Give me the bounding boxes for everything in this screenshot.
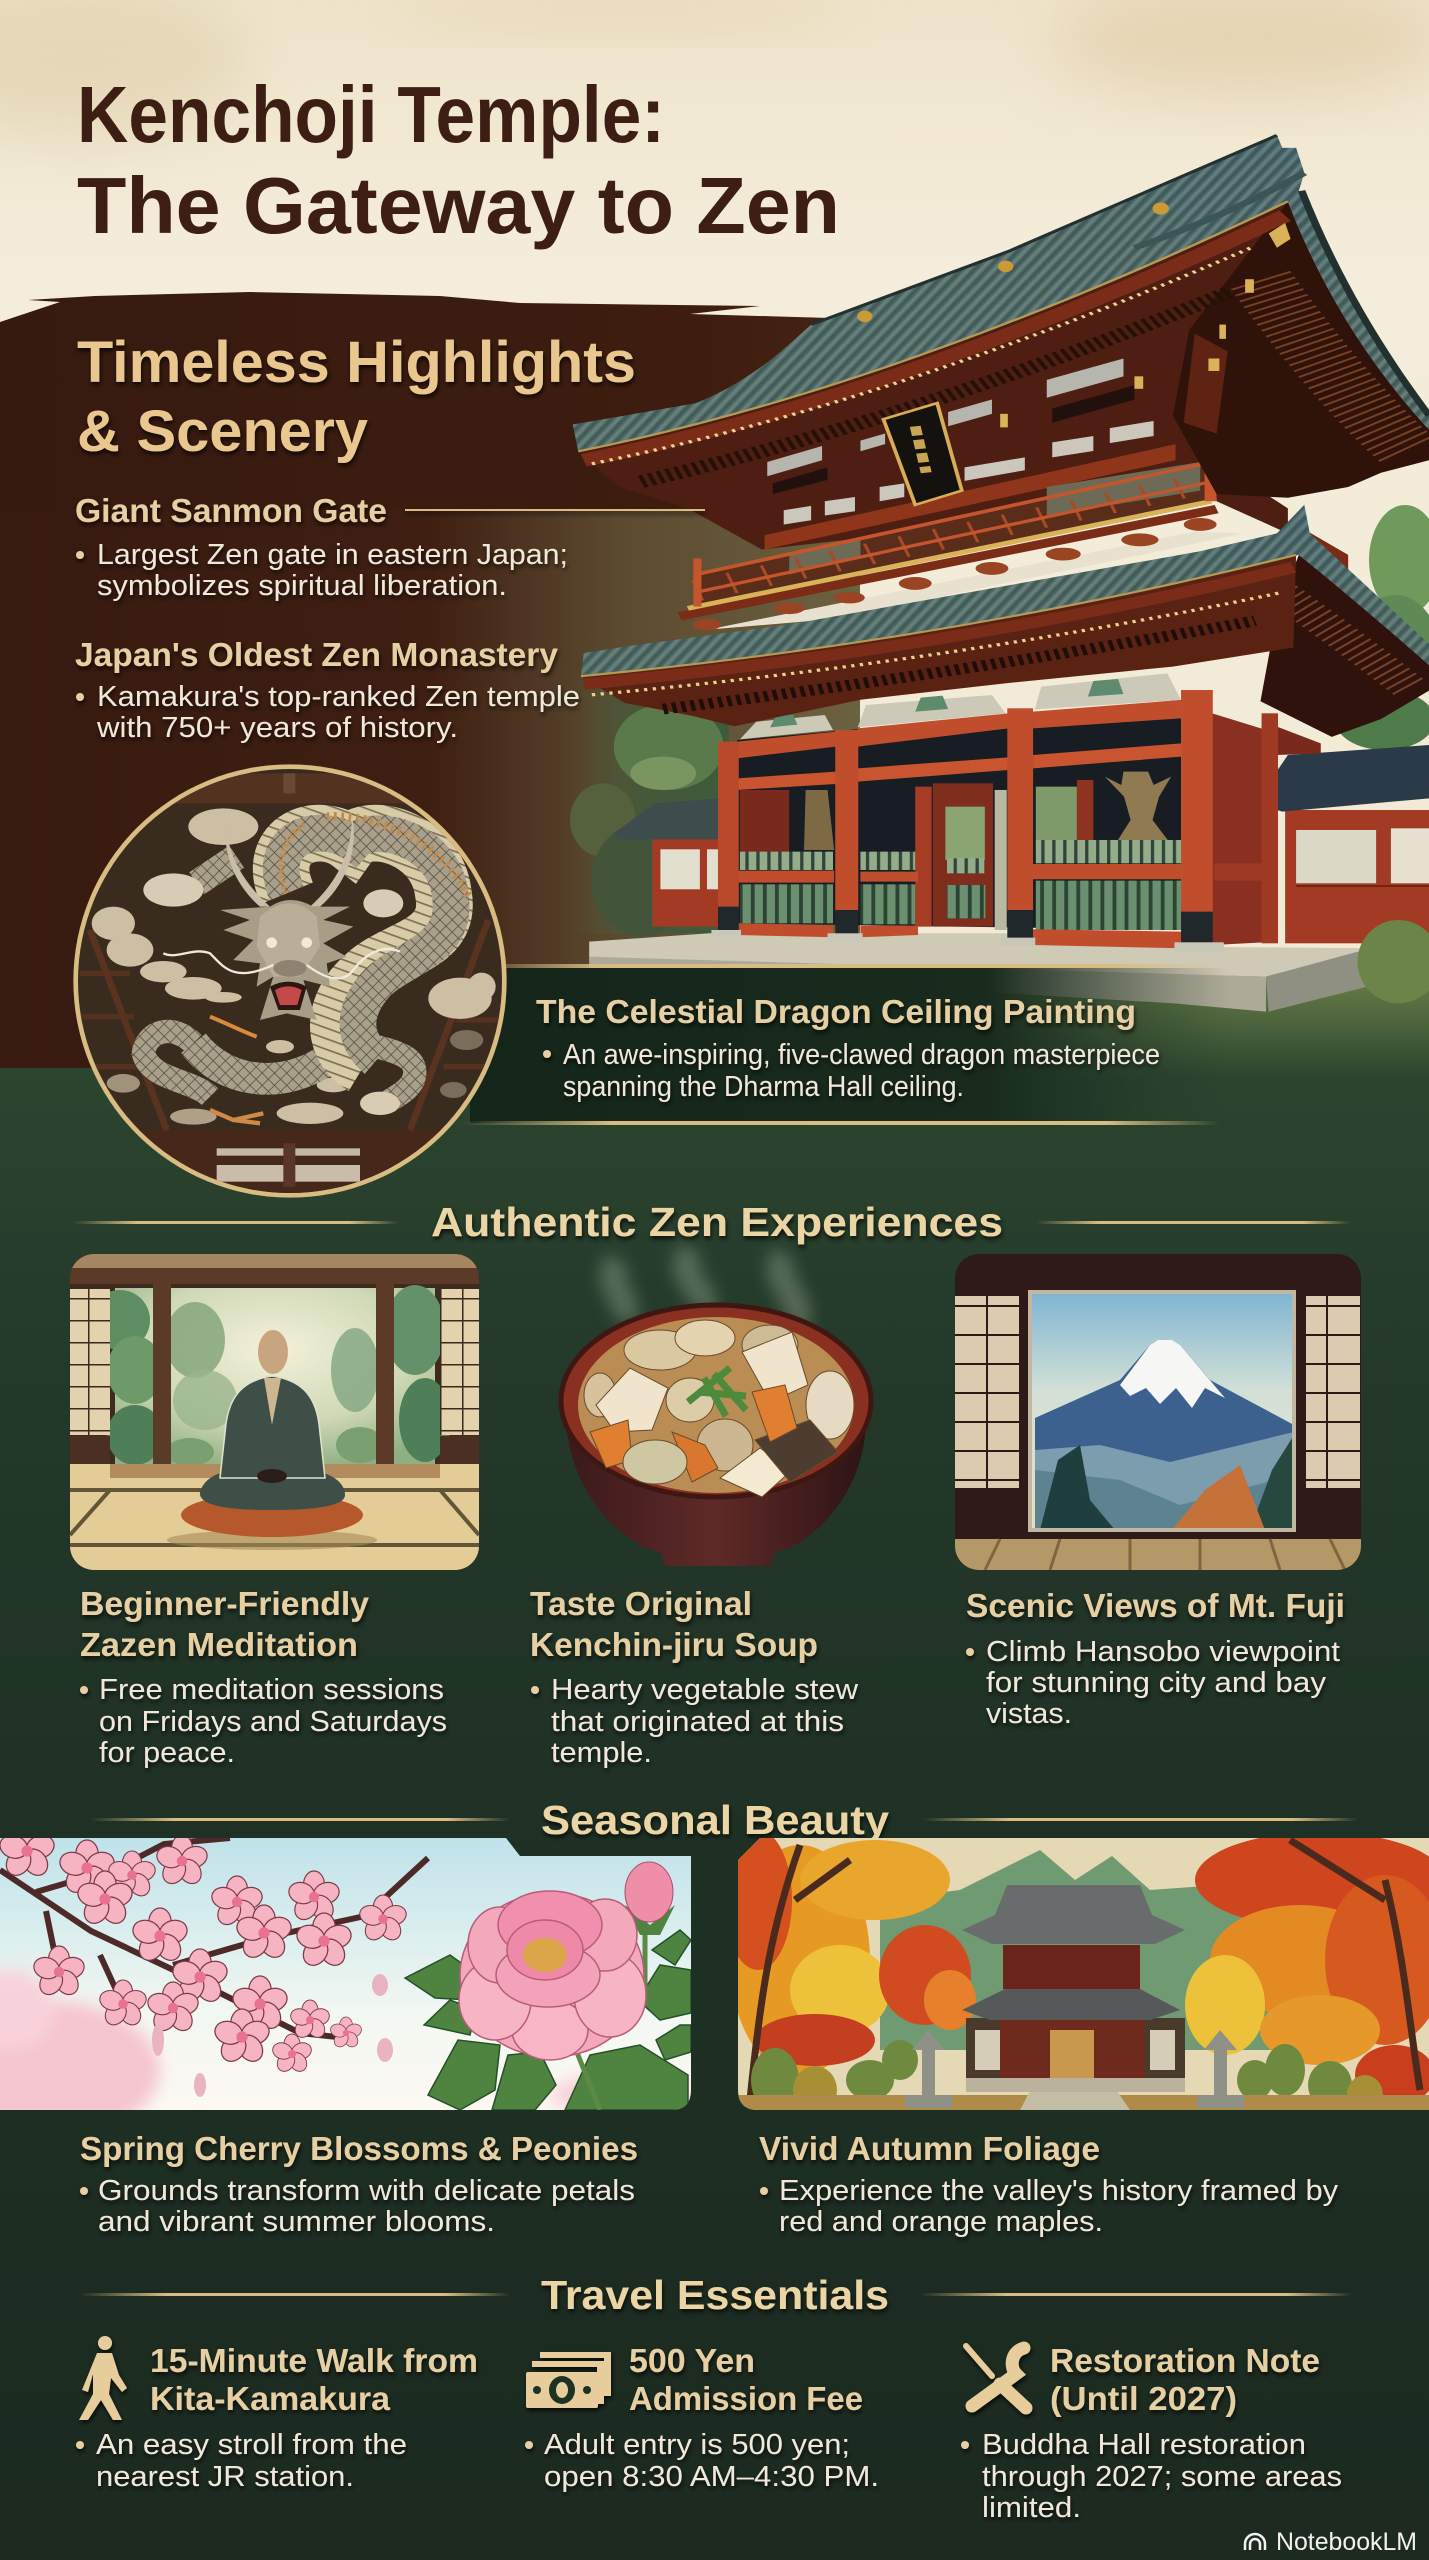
title: The Gateway to Zen bbox=[77, 161, 840, 250]
lower eave bbox=[581, 555, 1429, 737]
upper eave bbox=[584, 216, 1291, 482]
essential: walk from Kita-Kamakura: Kita-Kamakura bbox=[150, 2380, 391, 2417]
highlight: giant sanmon gate: Giant Sanmon Gate bbox=[75, 492, 387, 529]
essential: restoration note bbox=[961, 2342, 1342, 2524]
image: spring blossoms and peony bbox=[0, 1838, 691, 2110]
claws bbox=[143, 873, 403, 1115]
heading: & Scenery bbox=[77, 399, 368, 464]
illustration: dragon ceiling medallion bbox=[73, 764, 507, 1203]
section heading: authentic zen experiences bbox=[73, 1199, 1350, 1245]
column: views of Mt. Fuji: Scenic Views of Mt. Fuji bbox=[966, 1587, 1345, 1624]
image: zazen meditation room bbox=[70, 1254, 479, 1570]
icon: wrench and screwdriver bbox=[966, 2346, 1026, 2408]
illustration: Kenchoji Sanmon gate bbox=[570, 135, 1429, 1077]
gate upper structure bbox=[573, 135, 1429, 737]
column: kenchin-jiru soup: Hearty vegetable stew bbox=[551, 1674, 859, 1706]
caption: autumn foliage: Experience the valley's history framed by bbox=[779, 2175, 1339, 2207]
highlight: oldest monastery bbox=[75, 636, 580, 744]
dragon body bbox=[143, 816, 470, 1123]
highlight: oldest monastery: Kamakura's top-ranked Zen temple bbox=[97, 681, 580, 713]
caption: spring blossoms: Grounds transform with delicate petals bbox=[98, 2175, 635, 2207]
caption: autumn foliage bbox=[759, 2130, 1339, 2238]
caption panel: dragon painting: spanning the Dharma Hall ceiling. bbox=[563, 1071, 964, 1103]
highlight: oldest monastery: with 750+ years of history. bbox=[96, 712, 458, 744]
column: zazen meditation: Zazen Meditation bbox=[80, 1626, 358, 1663]
highlight: oldest monastery: Japan's Oldest Zen Monastery bbox=[75, 636, 559, 673]
column: zazen meditation: on Fridays and Saturdays bbox=[99, 1706, 447, 1738]
essential: restoration note: Buddha Hall restoration bbox=[982, 2429, 1306, 2461]
caption: autumn foliage: Vivid Autumn Foliage bbox=[759, 2130, 1100, 2167]
section heading: seasonal beauty bbox=[90, 1797, 1358, 1843]
essential: restoration note: Restoration Note bbox=[1050, 2342, 1320, 2379]
column: zazen meditation: Free meditation sessions bbox=[99, 1674, 444, 1706]
column: kenchin-jiru soup: temple. bbox=[551, 1737, 652, 1769]
column: kenchin-jiru soup bbox=[530, 1585, 859, 1769]
title bbox=[77, 70, 840, 250]
column: zazen meditation: for peace. bbox=[99, 1737, 235, 1769]
image: autumn temple bbox=[724, 1830, 1429, 2115]
section heading: travel essentials: Travel Essentials bbox=[541, 2272, 889, 2318]
right trees bbox=[1335, 505, 1429, 750]
caption: spring blossoms bbox=[80, 2130, 638, 2238]
essential: walk from Kita-Kamakura: An easy stroll from the bbox=[96, 2429, 407, 2461]
signboard bbox=[883, 403, 962, 505]
essential: admission fee: Adult entry is 500 yen; bbox=[544, 2429, 850, 2461]
icon: walking person bbox=[79, 2336, 127, 2420]
column: zazen meditation: Beginner-Friendly bbox=[80, 1585, 370, 1622]
interior bbox=[737, 700, 1181, 930]
caption panel: dragon painting: The Celestial Dragon Ceiling Painting bbox=[536, 993, 1136, 1030]
essential: admission fee: 500 Yen bbox=[629, 2342, 755, 2379]
caption: spring blossoms: Spring Cherry Blossoms & Peonies bbox=[80, 2130, 638, 2167]
heading: Timeless Highlights bbox=[77, 330, 636, 395]
column: views of Mt. Fuji: vistas. bbox=[986, 1698, 1072, 1730]
lower roof bbox=[581, 505, 1429, 676]
essential: restoration note: limited. bbox=[982, 2492, 1081, 2524]
title: Kenchoji Temple: bbox=[77, 70, 665, 159]
image: window view of Mt. Fuji bbox=[955, 1254, 1361, 1570]
section heading: authentic zen experiences: Authentic Zen Experiences bbox=[431, 1199, 1003, 1245]
caption: spring blossoms: and vibrant summer blooms. bbox=[98, 2206, 495, 2238]
caption panel: dragon painting: An awe-inspiring, five-clawed dragon masterpiece bbox=[563, 1039, 1160, 1071]
heading bbox=[77, 330, 636, 464]
essential: walk from Kita-Kamakura bbox=[76, 2336, 478, 2493]
temple bbox=[962, 1885, 1185, 2092]
highlight: giant sanmon gate bbox=[75, 492, 705, 602]
section heading: seasonal beauty: Seasonal Beauty bbox=[541, 1797, 889, 1843]
caption panel: dragon painting bbox=[460, 964, 1230, 1125]
highlight: giant sanmon gate: Largest Zen gate in eastern Japan; bbox=[97, 539, 568, 571]
panel: highlights bbox=[75, 330, 705, 744]
highlight: giant sanmon gate: symbolizes spiritual liberation. bbox=[97, 570, 507, 602]
essential: walk from Kita-Kamakura: nearest JR station. bbox=[96, 2461, 354, 2493]
monk bbox=[181, 1330, 363, 1537]
essential: admission fee bbox=[525, 2342, 879, 2493]
column: views of Mt. Fuji: Climb Hansobo viewpoint bbox=[986, 1636, 1340, 1668]
logo: NotebookLM: NotebookLM bbox=[1276, 2528, 1417, 2556]
brown brushed panel bbox=[0, 292, 1000, 1090]
upper roof bbox=[573, 135, 1429, 451]
clouds bbox=[92, 808, 496, 1125]
essential: restoration note: through 2027; some areas bbox=[982, 2461, 1342, 2493]
essential: admission fee: Admission Fee bbox=[629, 2380, 863, 2417]
upper right rafters bbox=[1000, 201, 1429, 498]
essential: restoration note: (Until 2027) bbox=[1050, 2380, 1237, 2417]
icon: banknotes bbox=[526, 2352, 611, 2408]
left pavilion bbox=[614, 798, 721, 927]
column: kenchin-jiru soup: that originated at this bbox=[551, 1706, 844, 1738]
image: kenchin-jiru bowl bbox=[561, 1250, 871, 1566]
pillars bbox=[711, 690, 1224, 952]
balcony bbox=[680, 451, 1348, 630]
essential: admission fee: open 8:30 AM–4:30 PM. bbox=[544, 2461, 879, 2493]
caption: autumn foliage: red and orange maples. bbox=[779, 2206, 1103, 2238]
column: views of Mt. Fuji bbox=[966, 1587, 1345, 1730]
platform bbox=[589, 933, 1370, 1012]
upper body bbox=[578, 201, 1293, 549]
essential: walk from Kita-Kamakura: 15-Minute Walk from bbox=[150, 2342, 478, 2379]
column: zazen meditation bbox=[80, 1585, 447, 1769]
right wall bbox=[1212, 713, 1277, 945]
bush bbox=[1357, 920, 1429, 1003]
green lower background bbox=[0, 1068, 1429, 2560]
column: kenchin-jiru soup: Taste Original bbox=[530, 1585, 752, 1622]
right pavilion bbox=[1255, 745, 1429, 943]
section heading: travel essentials bbox=[80, 2272, 1352, 2318]
dragon head bbox=[163, 813, 400, 1020]
parchment background bbox=[0, 0, 1429, 1100]
column: views of Mt. Fuji: for stunning city and bay bbox=[986, 1667, 1327, 1699]
column: kenchin-jiru soup: Kenchin-jiru Soup bbox=[530, 1626, 818, 1663]
peony bbox=[405, 1862, 691, 2110]
gate lower storey bbox=[570, 673, 1429, 1077]
beams and panels bbox=[740, 673, 1181, 739]
